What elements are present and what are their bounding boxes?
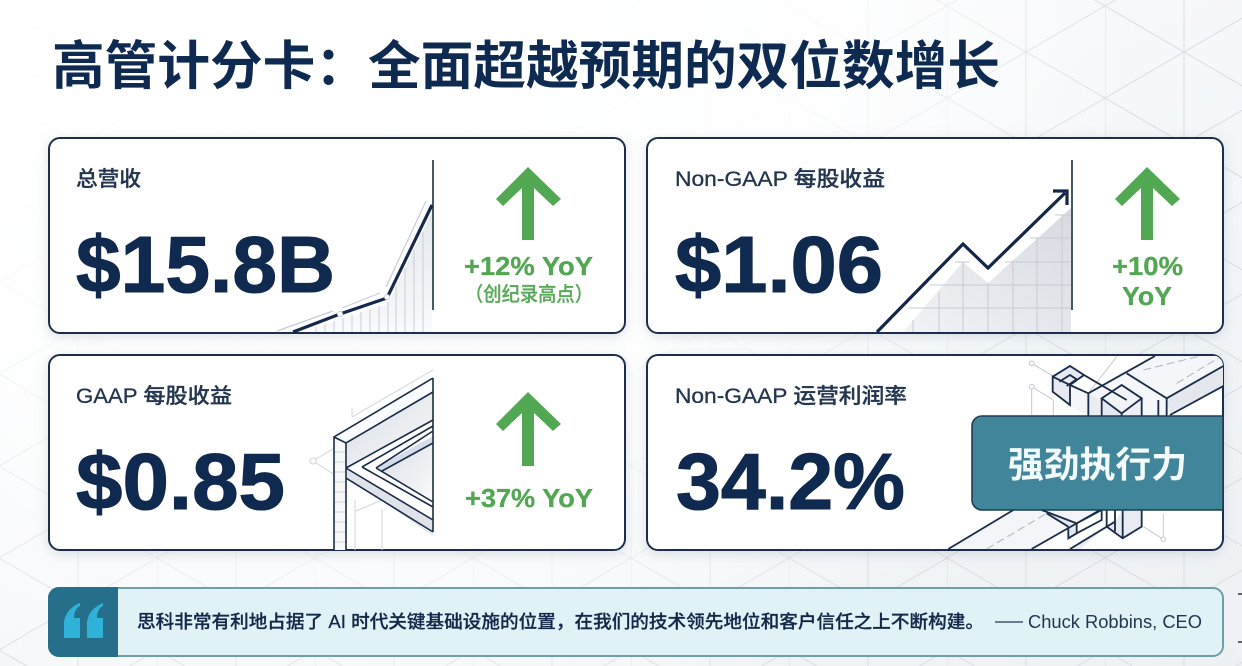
- note: record high: （创纪录高点）: [465, 283, 593, 306]
- badge: strong execution: [972, 416, 1223, 510]
- label: GAAP EPS: GAAP 每股收益: [76, 385, 232, 408]
- icon: up arrow: [496, 392, 561, 466]
- quote banner: [48, 587, 1223, 657]
- label: total revenue: 总营收: [76, 168, 141, 191]
- value: non-GAAP EPS: $1.06: [675, 220, 883, 309]
- attribution: Chuck Robbins, CEO: [1028, 612, 1202, 632]
- illustration: blueprint structure: [948, 355, 1223, 549]
- chart: EPS growth line: [877, 191, 1071, 332]
- change: +37% YoY: +37% YoY: [465, 483, 593, 513]
- value: GAAP EPS: $0.85: [76, 437, 285, 526]
- title: 高管计分卡：全面超越预期的双位数增长: [52, 37, 1000, 96]
- divider: [432, 160, 434, 310]
- icon: up arrow: [1115, 167, 1180, 240]
- panel: total revenue: [49, 138, 625, 333]
- value: operating margin: 34.2%: [676, 437, 905, 526]
- change: +10%: +10%: [1112, 251, 1183, 281]
- icon: quotation marks: [64, 603, 103, 638]
- panel: GAAP EPS: [49, 355, 625, 566]
- quote text: 思科非常有利地占据了 AI 时代关键基础设施的位置，在我们的技术领先地位和客户信任之上不断构建。: [137, 611, 984, 632]
- change: YoY: YoY: [1122, 281, 1172, 311]
- panel: non-GAAP operating margin: [647, 355, 1223, 550]
- icon: up arrow: [496, 167, 561, 240]
- label: non-GAAP EPS: Non-GAAP 每股收益: [675, 168, 885, 191]
- badge: strong execution: 强劲执行力: [1008, 444, 1187, 485]
- value: total revenue: $15.8B: [76, 220, 335, 309]
- quote icon panel: [48, 587, 118, 657]
- change: +12% YoY: +12% YoY: [464, 251, 593, 281]
- divider: [1071, 160, 1073, 310]
- label: non-GAAP operating margin: Non-GAAP 运营利润率: [675, 385, 907, 408]
- chart: revenue growth line: [277, 201, 432, 332]
- panel: non-GAAP EPS: [647, 138, 1223, 333]
- illustration: blueprint beam: [310, 370, 433, 566]
